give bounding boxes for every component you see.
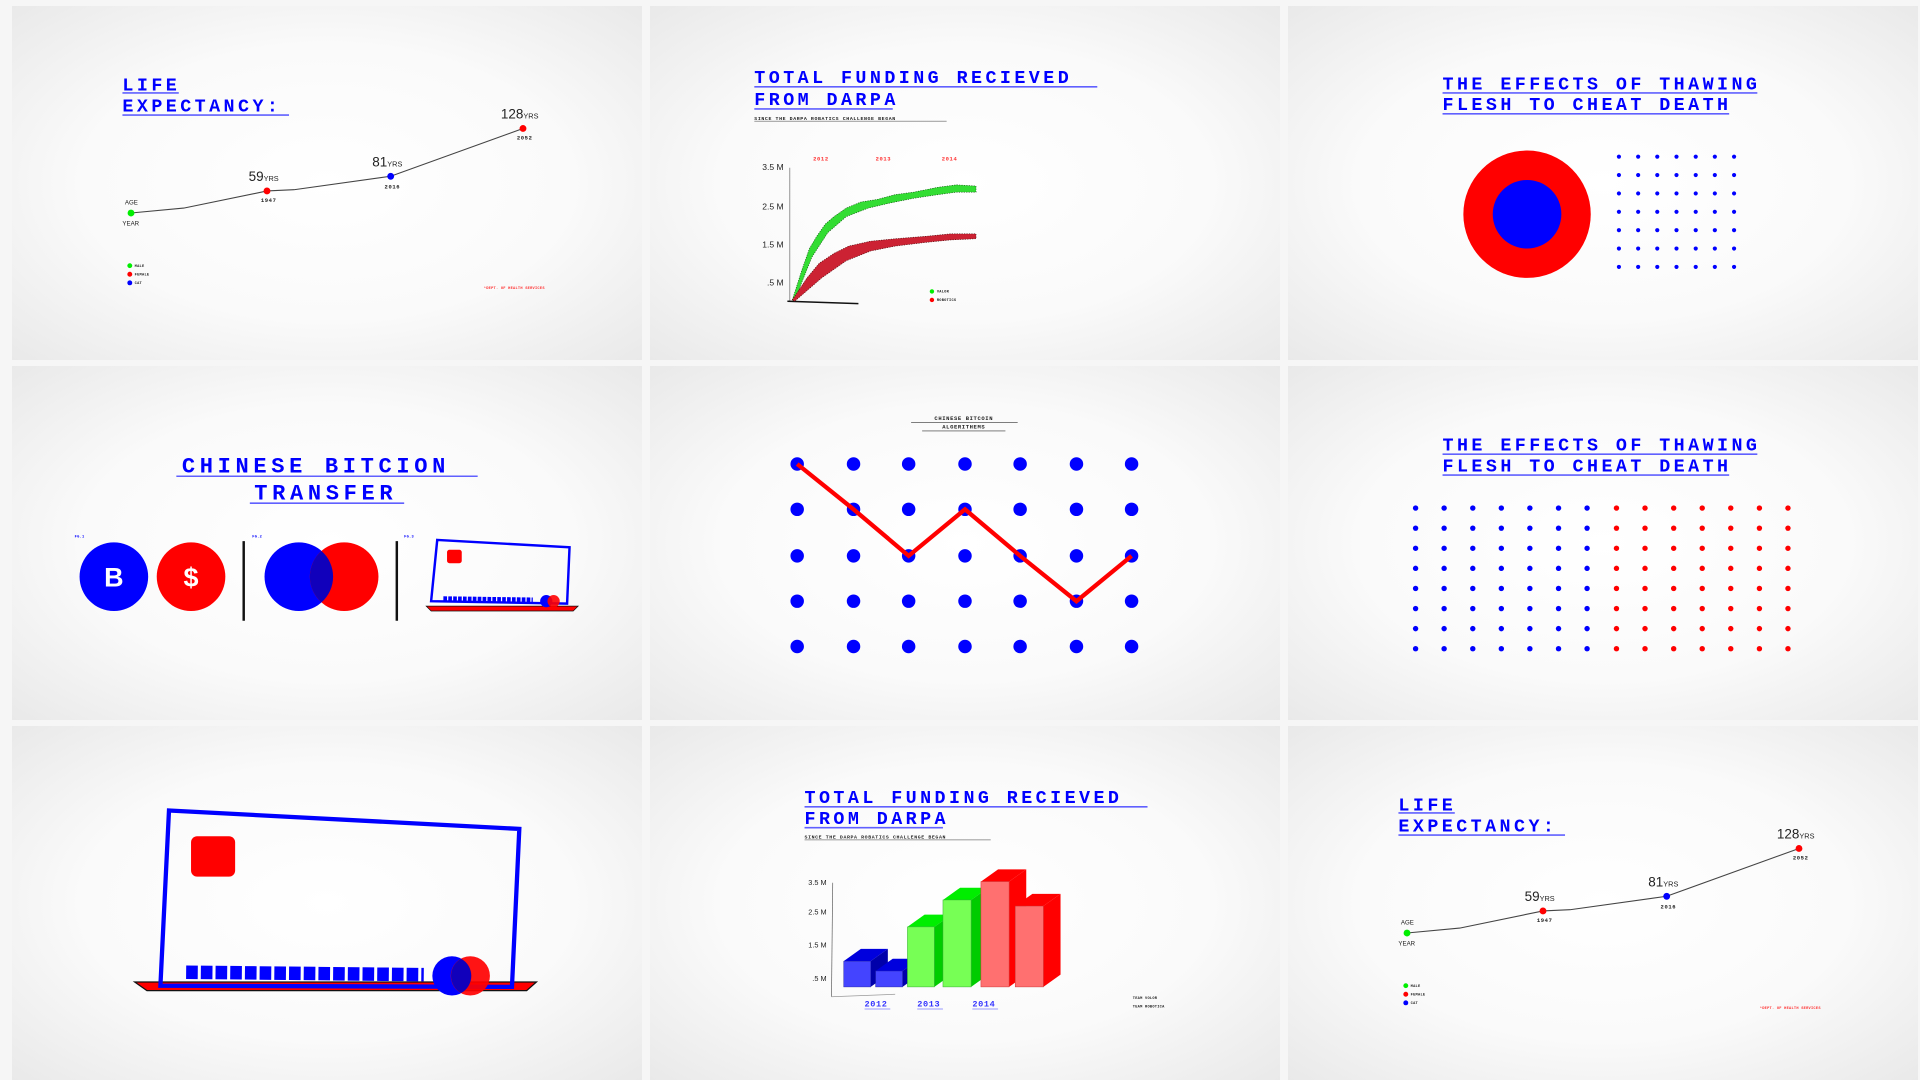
title: total funding: TOTAL FUNDING RECIEVED [754, 68, 1072, 89]
line chart: life expectancy: 59YRS [1525, 889, 1555, 904]
bars [844, 949, 888, 961]
ribbon chart: ROBOTICS [937, 299, 957, 303]
line chart: life expectancy: 81YRS [372, 154, 402, 169]
title: life expectancy [1398, 796, 1565, 837]
title: thawing flesh [1443, 74, 1760, 116]
3d bar chart: .5 M [812, 974, 827, 983]
line chart: life expectancy: 59YRS [249, 169, 279, 184]
3d bar chart: 2.5 M [808, 908, 827, 917]
panel: thawing flesh circles (top right) [1288, 6, 1918, 360]
line chart: life expectancy: 128YRS [501, 107, 539, 122]
icon: target circle [1463, 151, 1591, 278]
line chart: life expectancy [1398, 827, 1815, 947]
title: life expectancy: EXPECTANCY: [122, 96, 281, 117]
line chart: life expectancy: 2016 [385, 184, 400, 191]
ribbon chart: VALOR [937, 291, 950, 295]
legend: MALE [135, 265, 145, 269]
3d bar chart: 2014 [972, 1000, 995, 1010]
panel: large card (bottom left) [12, 726, 642, 1080]
title: total funding: FROM DARPA [805, 809, 949, 830]
ribbon chart: 2012 [813, 155, 829, 162]
panel: chinese bitcoin transfer (middle left) [12, 366, 642, 720]
title: thawing flesh: THE EFFECTS OF THAWING [1443, 74, 1760, 95]
panel: thawing flesh dot grid (middle right) [1288, 366, 1918, 720]
dot grid blue and red [1413, 505, 1791, 651]
legend [1133, 997, 1165, 1010]
legend: FEMALE [1411, 993, 1426, 997]
fig 1: coins: $ [184, 562, 199, 592]
3d bar chart: 1.5 M [808, 941, 827, 950]
title: bitcoin transfer: TRANSFER [254, 482, 397, 507]
legend: CAT [135, 282, 143, 286]
ribbon chart: 2013 [876, 155, 891, 162]
title: thawing flesh: FLESH TO CHEAT DEATH [1443, 95, 1731, 116]
line chart: life expectancy: 1947 [261, 197, 277, 204]
title: algorithms: ALGERITHEMS [942, 423, 985, 430]
legend: TEAM VOLOR [1133, 997, 1158, 1001]
panel: bitcoin algorithms dot grid (center) [650, 366, 1280, 720]
ribbon chart: .5 M [767, 277, 784, 287]
panel: darpa funding line chart (top middle) [650, 6, 1280, 360]
title: total funding [805, 788, 1148, 841]
legend [1403, 983, 1426, 1006]
panel: life expectancy (bottom right) [1288, 726, 1918, 1080]
line chart: life expectancy: YEAR [122, 220, 140, 227]
ribbon chart: 2014 [942, 155, 957, 162]
line chart: life expectancy: AGE [125, 199, 138, 206]
fig 2: overlapping circles [252, 535, 378, 611]
line chart: life expectancy: AGE [1401, 919, 1414, 926]
title: life expectancy: LIFE [1398, 796, 1456, 817]
title: total funding: FROM DARPA [754, 90, 899, 111]
legend: TEAM ROBOTICA [1133, 1006, 1165, 1010]
line chart: life expectancy [122, 107, 539, 227]
title: life expectancy: LIFE [122, 76, 180, 97]
title: bitcoin transfer: CHINESE BITCION [182, 455, 450, 480]
title: thawing flesh: FLESH TO CHEAT DEATH [1443, 456, 1731, 477]
fig 3: small card [404, 535, 578, 611]
3d bar chart: 2012 [865, 1000, 888, 1010]
panel: life expectancy (top left) [12, 6, 642, 360]
title: total funding: TOTAL FUNDING RECIEVED [805, 788, 1122, 809]
legend [127, 263, 150, 286]
footnote: *DEPT. OF HEALTH SERVICES [1760, 1006, 1821, 1011]
3d bar chart: 3.5 M [808, 878, 827, 887]
title: life expectancy [122, 76, 289, 117]
title: total funding: SINCE THE DARPA ROBATICS CHALLENGE BEGAN [805, 835, 946, 841]
legend: FEMALE [135, 273, 150, 277]
line chart: life expectancy: 81YRS [1648, 874, 1678, 889]
ribbon chart: 1.5 M [762, 239, 784, 249]
line chart: life expectancy: 2052 [517, 135, 533, 142]
3d bar chart [808, 869, 1061, 1010]
icon: card [135, 811, 536, 995]
title: bitcoin transfer [176, 455, 478, 507]
title: algorithms: CHINESE BITCOIN [934, 415, 993, 422]
dot grid with path [790, 457, 1138, 653]
ribbon chart: 3.5 M [762, 162, 784, 172]
line chart: life expectancy: 128YRS [1777, 827, 1815, 842]
title: thawing flesh: THE EFFECTS OF THAWING [1443, 436, 1760, 457]
title: algorithms [911, 415, 1018, 431]
legend: MALE [1411, 985, 1421, 989]
line chart: life expectancy: 2052 [1793, 855, 1809, 862]
fig 3: small card: FG.3 [404, 535, 414, 539]
fig 1: coins [75, 535, 225, 611]
line chart: life expectancy: YEAR [1398, 940, 1416, 947]
title: total funding [754, 68, 1097, 122]
panel: darpa funding bar chart (bottom middle) [650, 726, 1280, 1080]
footnote: *DEPT. OF HEALTH SERVICES [484, 286, 545, 291]
title: total funding: SINCE THE DARPA ROBATICS CHALLENGE BEGAN [754, 116, 896, 122]
legend: CAT [1411, 1002, 1419, 1006]
title: life expectancy: EXPECTANCY: [1398, 816, 1557, 837]
line chart: life expectancy: 2016 [1661, 904, 1676, 911]
fig 1: coins: FG.1 [75, 535, 85, 539]
line chart: life expectancy: 1947 [1537, 917, 1553, 924]
fig 2: overlapping circles: FG.2 [252, 535, 262, 539]
ribbon chart [762, 155, 976, 304]
ribbon chart: 2.5 M [762, 201, 784, 211]
dot grid [1617, 155, 1736, 269]
fig 1: coins: B [104, 562, 124, 592]
3d bar chart: 2013 [917, 1000, 940, 1010]
title: thawing flesh [1443, 436, 1760, 477]
